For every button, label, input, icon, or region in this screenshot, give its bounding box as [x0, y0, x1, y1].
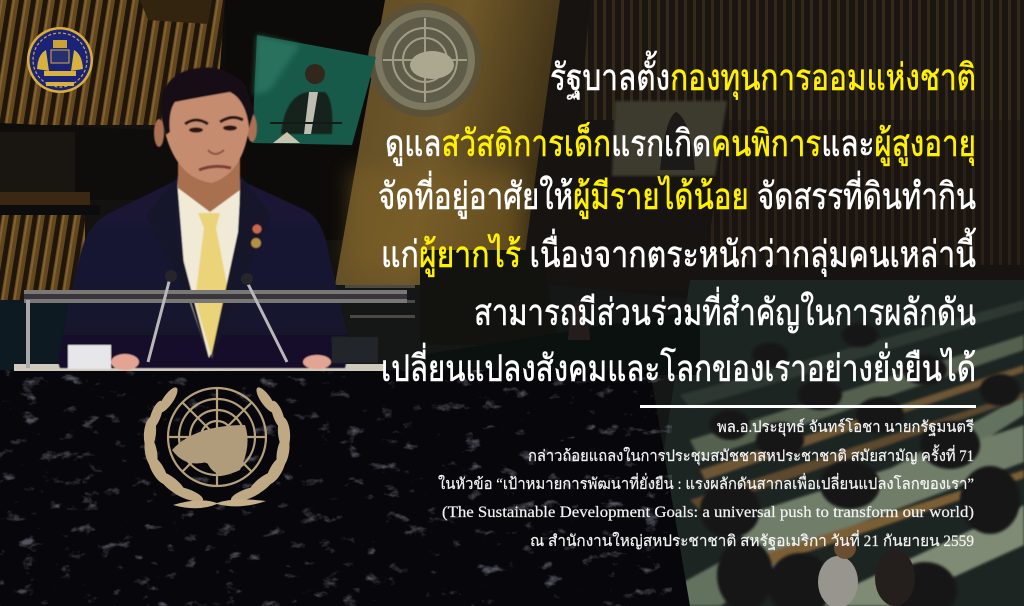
attribution text: (The Sustainable Development Goals: a universal push to transform our world)	[442, 504, 974, 521]
headline: จัดที่อยู่อาศัยให้ผู้มีรายได้น้อย จัดสรรที่ดินทำกิน	[378, 170, 976, 219]
attribution text: ในหัวข้อ “เป้าหมายการพัฒนาที่ยั่งยืน : แรงผลักดันสากลเพื่อเปลี่ยนแปลงโลกของเรา”	[438, 473, 974, 493]
attribution text: กล่าวถ้อยแถลงในการประชุมสมัชชาสหประชาชาติ สมัยสามัญ ครั้งที่ 71	[528, 444, 974, 466]
shirt	[177, 180, 240, 358]
neck and face	[178, 155, 240, 212]
divider rule	[640, 405, 976, 408]
screen showing the speaker	[252, 35, 376, 145]
attribution text: พล.อ.ประยุทธ์ จันทร์โอชา นายกรัฐมนตรี	[717, 418, 974, 437]
speaker	[58, 68, 378, 370]
dais and speaker figure	[420, 250, 560, 345]
tie	[195, 213, 230, 358]
second screen	[612, 101, 727, 176]
attribution text	[438, 418, 974, 550]
eyes and mouth	[185, 117, 243, 124]
government seal logo	[27, 27, 93, 93]
lapels	[146, 176, 210, 362]
attribution text: ณ สำนักงานใหญ่สหประชาชาติ สหรัฐอเมริกา วันที่ 21 กันยายน 2559	[530, 530, 974, 550]
steps beside dais	[345, 285, 415, 318]
lectern rail and microphones	[24, 270, 407, 368]
headline: ดูแลสวัสดิการเด็กแรกเกิดคนพิการและผู้สูงอายุ	[385, 120, 976, 166]
marble podium	[0, 364, 690, 606]
headline	[378, 50, 977, 389]
UN emblem on podium	[142, 385, 292, 508]
large UN emblem on wall	[368, 3, 482, 117]
hair	[161, 68, 254, 135]
hands and papers	[68, 345, 111, 369]
suit	[58, 180, 350, 368]
